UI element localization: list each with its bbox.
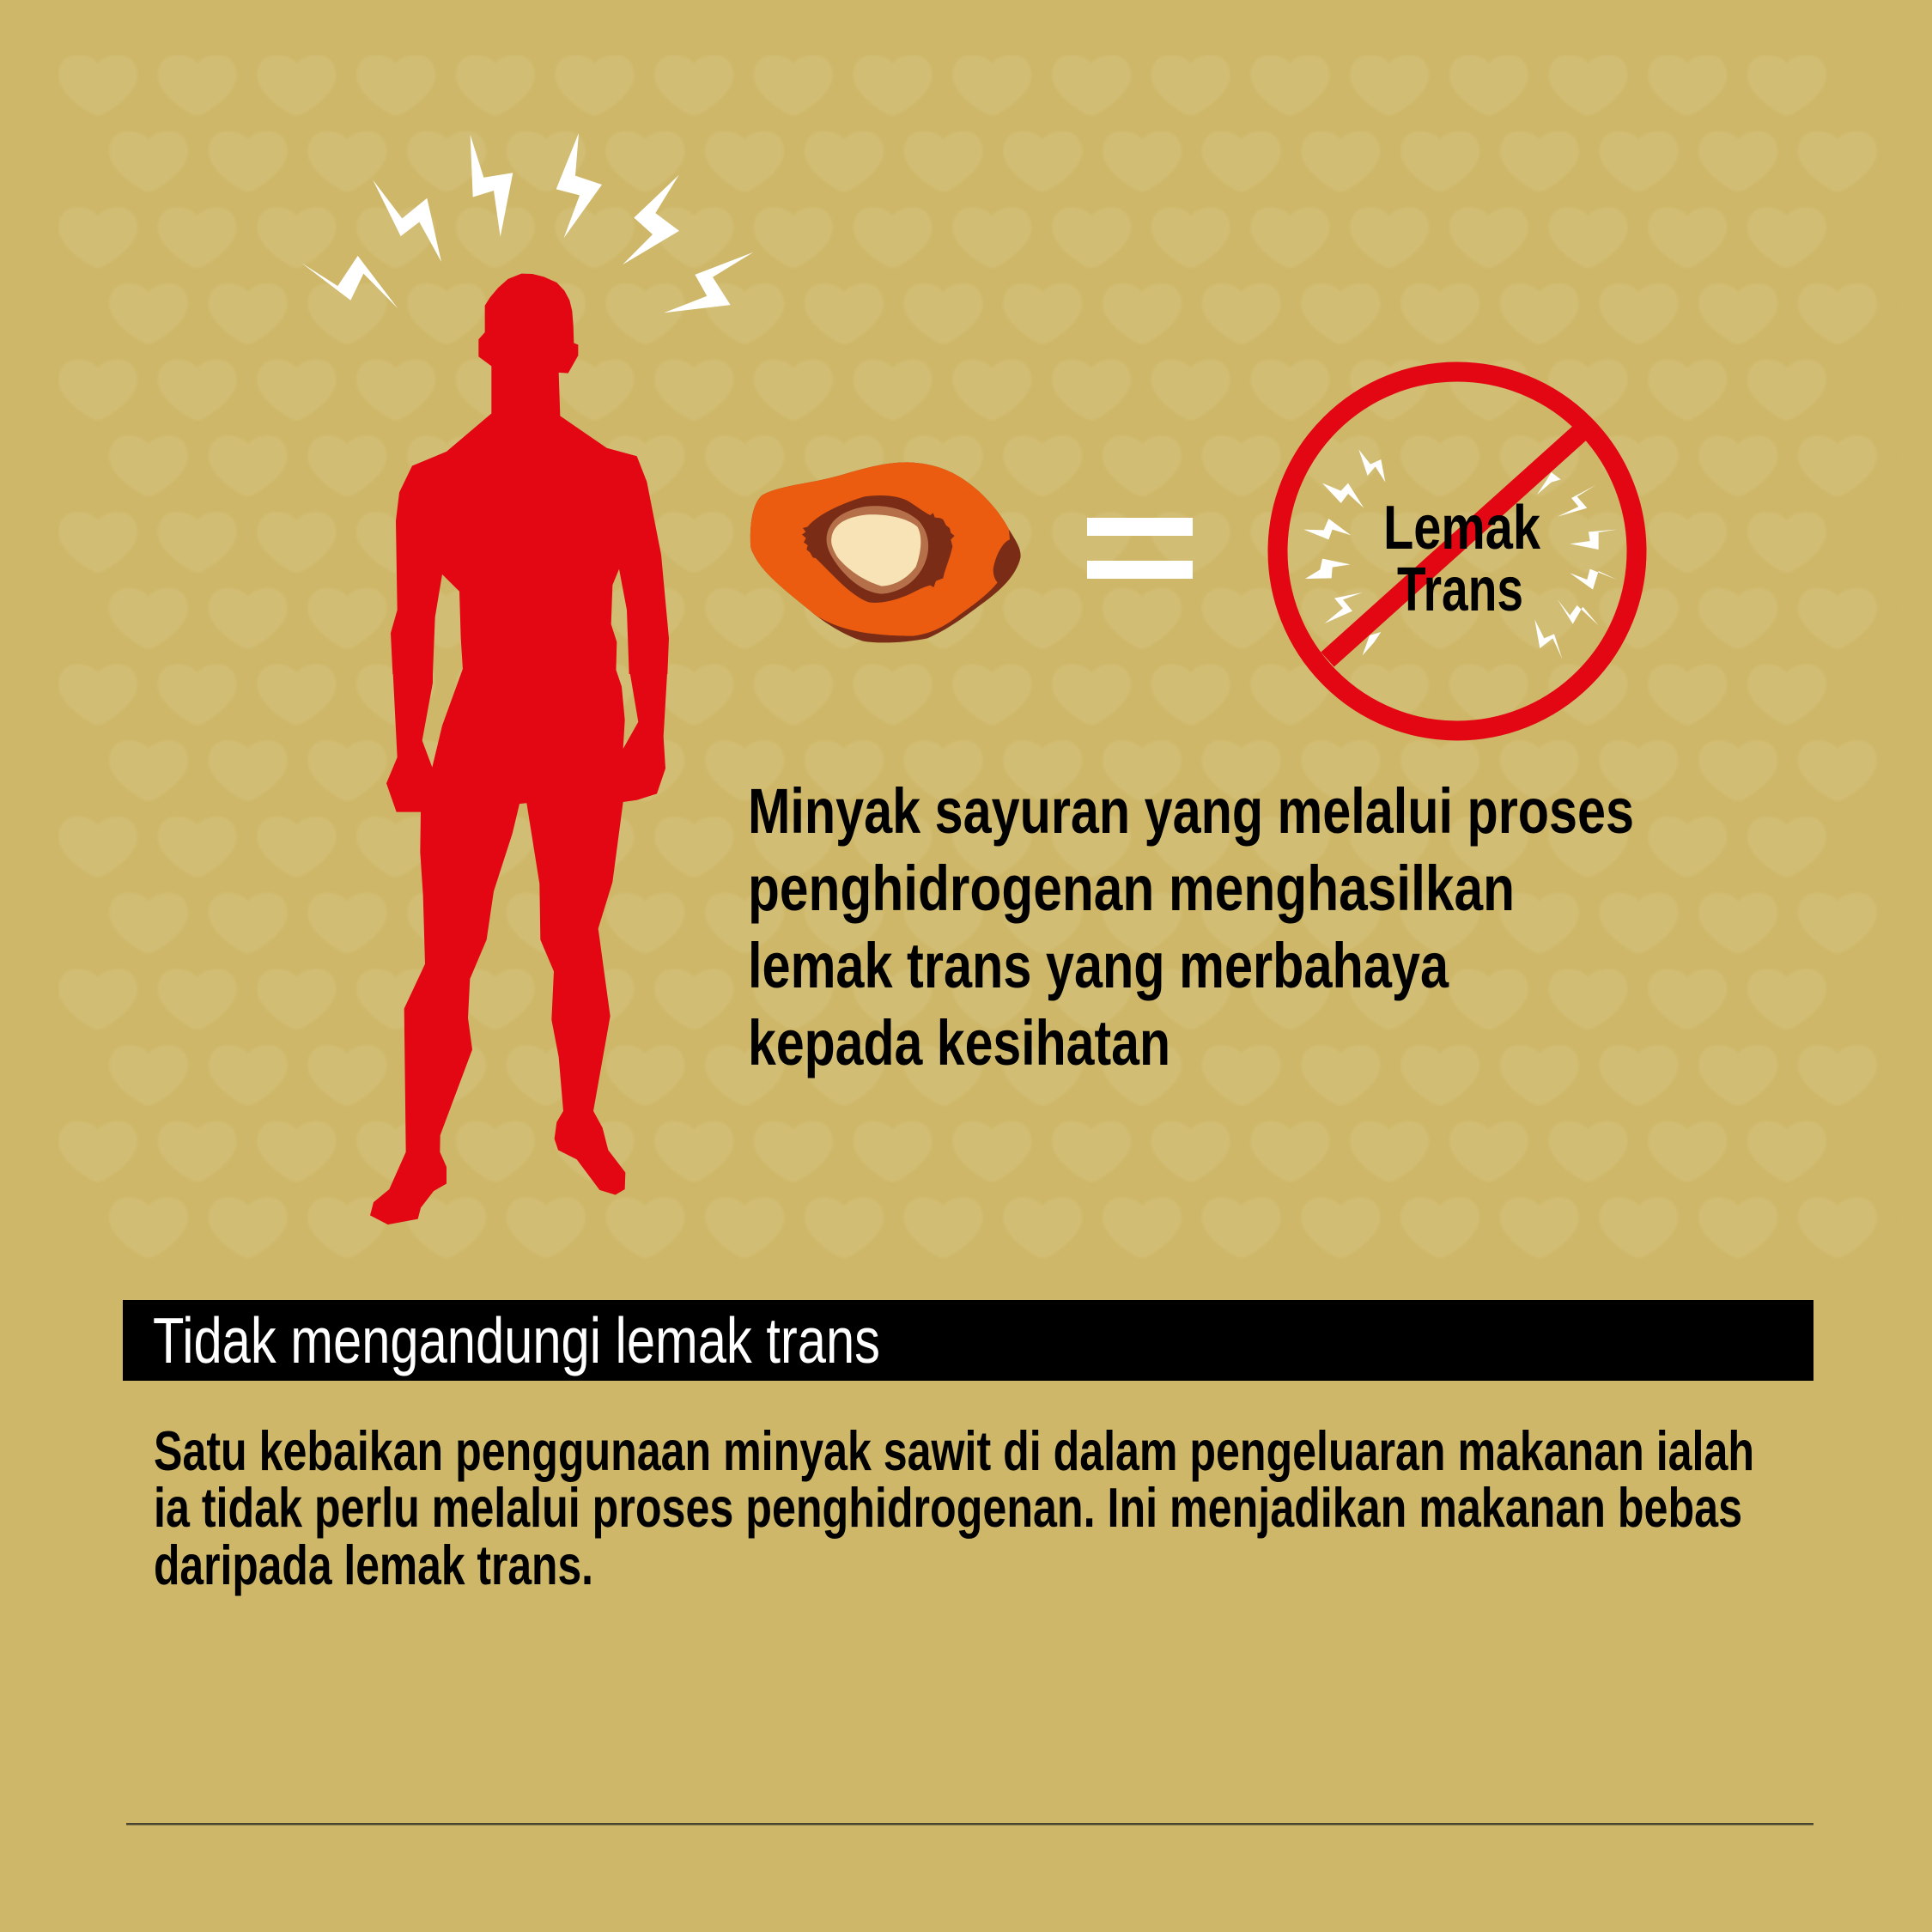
text block: palm oil benefit: daripada lemak trans. (154, 1534, 593, 1596)
heading bar (123, 1300, 1814, 1381)
text block: hydrogenation statement: lemak trans yang merbahaya (748, 930, 1449, 1001)
text block: hydrogenation statement: penghidrogenan menghasilkan (748, 853, 1515, 924)
icon: prohibition sign with Lemak Trans: Trans (1397, 556, 1523, 624)
heart pattern (58, 55, 1898, 1350)
label text: Lemak (1383, 494, 1541, 562)
red ring and slash (1278, 372, 1637, 731)
heading bar: Tidak mengandungi lemak trans (153, 1304, 880, 1376)
icon: red human silhouette (370, 274, 669, 1224)
small lightning bolts (1303, 449, 1617, 659)
text block: palm oil benefit (154, 1419, 1754, 1596)
icon: palm fruit cross-section (750, 462, 1021, 642)
text block: hydrogenation statement: Minyak sayuran yang melalui proses (748, 775, 1634, 847)
icon: lightning bolts around head (301, 133, 753, 313)
icon: equals sign (1087, 518, 1193, 579)
text block: hydrogenation statement (748, 775, 1634, 1078)
icon: prohibition sign with Lemak Trans (1278, 372, 1637, 731)
text block: hydrogenation statement: kepada kesihatan (748, 1007, 1170, 1078)
